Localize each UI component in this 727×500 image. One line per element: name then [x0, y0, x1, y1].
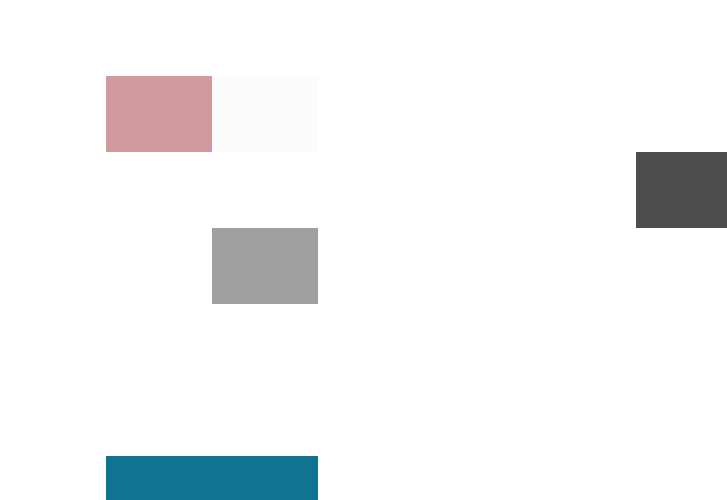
- panel: pink block: [106, 76, 212, 152]
- panel: teal block: [106, 456, 318, 500]
- panel: pale pink block: [212, 76, 318, 152]
- panel: dark grey block: [636, 152, 727, 228]
- panel: mid grey block: [212, 228, 318, 304]
